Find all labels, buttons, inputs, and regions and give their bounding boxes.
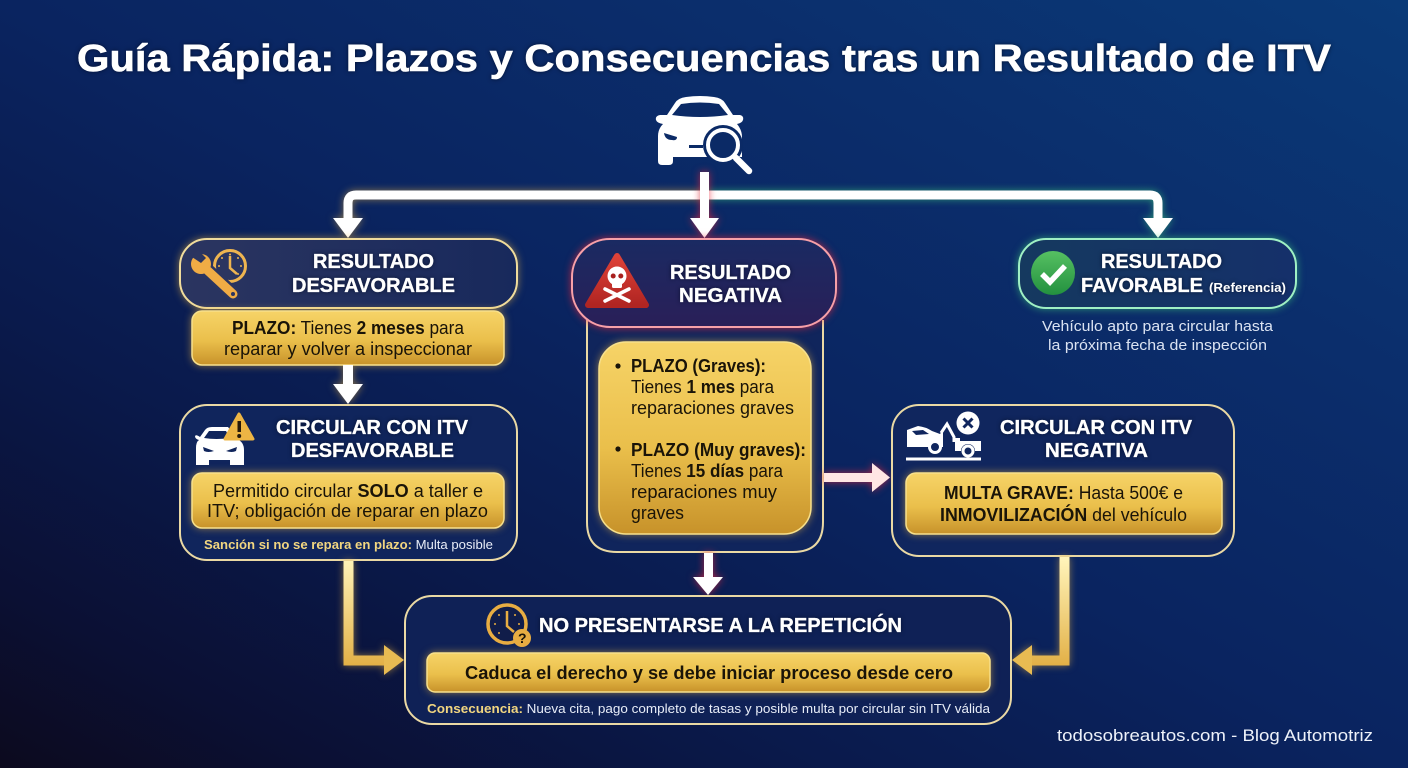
arrow: negativa circular to no presentarse: [1012, 557, 1064, 675]
callout: permitido circular: ITV; obligación de reparar en plazo: [207, 501, 488, 521]
callout: plazos graves y muy graves: PLAZO (Graves):: [631, 356, 766, 376]
callout: multa grave: MULTA GRAVE: Hasta 500€ e: [944, 483, 1183, 503]
footer credit: todosobreautos.com - Blog Automotriz: [1057, 726, 1373, 745]
icon: clock with question mark: ?: [518, 630, 527, 646]
icon: green check: [1031, 251, 1075, 295]
heading: (Referencia): [1209, 280, 1286, 295]
title: Guía Rápida: Plazos y Consecuencias tras un Resultado de ITV: [77, 38, 1332, 80]
arrow: branch to favorable: [704, 195, 1173, 238]
callout: plazos graves y muy graves: Tienes 1 mes para: [631, 377, 775, 397]
callout: caduca el derecho: Caduca el derecho y se debe iniciar proceso desde cero: [465, 663, 953, 683]
heading: CIRCULAR CON ITV: [276, 417, 469, 439]
heading: [276, 417, 469, 462]
callout: plazos graves y muy graves: reparaciones graves: [631, 398, 794, 418]
callout: plazos graves y muy graves: Tienes 15 días para: [631, 461, 784, 481]
panel: circular con itv negativa: [892, 405, 1234, 556]
icon: skull warning triangle: [588, 256, 646, 305]
callout: plazos graves y muy graves: [599, 342, 811, 534]
text: vehículo apto: [1042, 318, 1274, 354]
icon: clock with question mark: [488, 605, 531, 647]
arrow: branch to desfavorable: [333, 195, 704, 238]
heading: [292, 251, 455, 297]
heading: RESULTADO: [670, 262, 791, 284]
heading: [1000, 417, 1193, 462]
icon: car with magnifying glass: [656, 96, 749, 171]
callout: multa grave: INMOVILIZACIÓN del vehículo: [940, 504, 1187, 525]
heading: [1081, 251, 1286, 297]
arrow: desfavorable to no presentarse: [348, 561, 404, 675]
callout: plazo 2 meses: [192, 311, 504, 365]
panel: resultado desfavorable: [180, 239, 517, 308]
heading: FAVORABLE: [1081, 275, 1203, 297]
heading: NEGATIVA: [1045, 440, 1148, 462]
heading: DESFAVORABLE: [291, 440, 454, 462]
arrow: negativa to no presentarse: [693, 553, 723, 595]
arrow: negativa to circular: [824, 463, 890, 492]
callout: plazos graves y muy graves: graves: [631, 503, 684, 523]
icon: wrench and clock: [191, 250, 246, 296]
heading: [670, 262, 791, 307]
heading: NEGATIVA: [679, 285, 782, 307]
icon: car with warning triangle: [195, 414, 253, 465]
callout: plazos graves y muy graves: PLAZO (Muy graves):: [631, 440, 806, 460]
callout: plazos graves y muy graves: reparaciones muy: [631, 482, 777, 502]
heading: DESFAVORABLE: [292, 275, 455, 297]
callout: permitido circular: [192, 473, 504, 528]
note: consecuencia: Consecuencia: Nueva cita, pago completo de tasas y posible multa por circular sin ITV válida: [427, 701, 991, 716]
heading: RESULTADO: [313, 251, 434, 273]
panel: resultado negativa header: [572, 239, 836, 327]
callout: multa grave: [906, 473, 1222, 534]
callout: plazo 2 meses: PLAZO: Tienes 2 meses para: [232, 318, 465, 338]
panel: resultado favorable: [1019, 239, 1296, 308]
arrow: plazo to circular: [333, 365, 363, 404]
panel: circular con itv desfavorable: [180, 405, 517, 560]
panel: resultado negativa body: [587, 320, 823, 552]
text: vehículo apto: la próxima fecha de inspección: [1048, 337, 1267, 354]
icon: tow truck with x: [906, 412, 981, 460]
panel: no presentarse a la repetición: [405, 596, 1011, 724]
callout: caduca el derecho: [427, 653, 990, 692]
heading: CIRCULAR CON ITV: [1000, 417, 1193, 439]
text: vehículo apto: Vehículo apto para circular hasta: [1042, 318, 1274, 335]
heading: NO PRESENTARSE A LA REPETICIÓN: [539, 613, 902, 637]
callout: permitido circular: Permitido circular SOLO a taller e: [213, 481, 483, 501]
heading: RESULTADO: [1101, 251, 1222, 273]
note: sanción: Sanción si no se repara en plazo: Multa posible: [204, 537, 493, 552]
arrow: branch to negativa: [690, 172, 719, 238]
callout: plazo 2 meses: reparar y volver a inspeccionar: [224, 339, 472, 359]
